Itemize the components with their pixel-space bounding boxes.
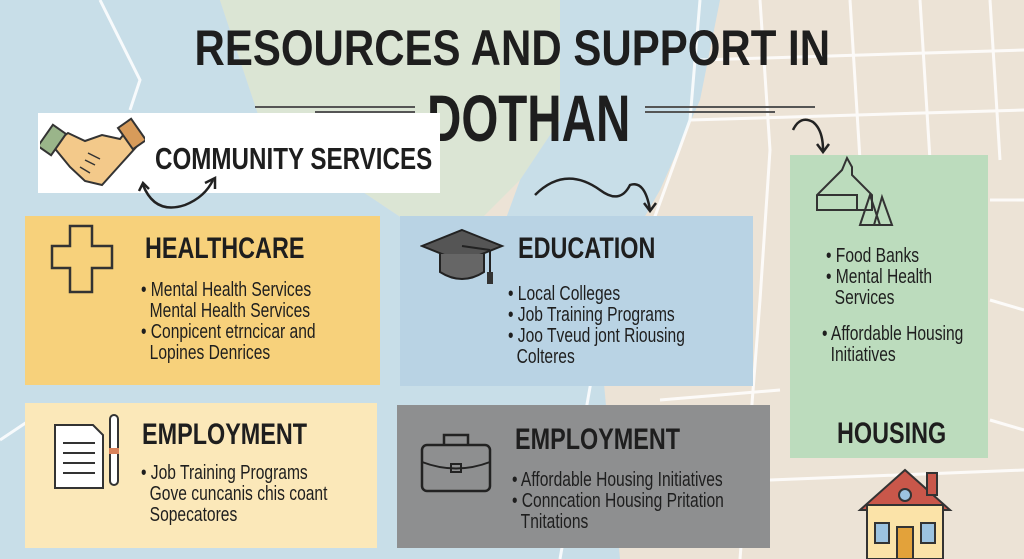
bullets bbox=[141, 279, 316, 364]
bullets: • Joo Tveud jont Riousing bbox=[508, 325, 685, 347]
panel: healthcare bbox=[25, 216, 380, 385]
icon: graduation cap bbox=[420, 228, 504, 284]
bullets: • Mental Health Services bbox=[141, 279, 311, 301]
bullets: • Local Colleges bbox=[508, 283, 620, 305]
bullets: Services bbox=[835, 287, 894, 309]
bullets: • Conncation Housing Pritation bbox=[512, 490, 724, 512]
bullets: • Mental Health bbox=[826, 266, 932, 288]
icon: document bbox=[54, 414, 119, 489]
bullets bbox=[141, 462, 328, 526]
bullets: Gove cuncanis chis coant bbox=[150, 483, 327, 505]
panel: education bbox=[400, 216, 753, 386]
heading: HOUSING bbox=[837, 417, 946, 450]
panel: housing: Initiatives bbox=[831, 344, 896, 366]
heading: EDUCATION bbox=[518, 232, 655, 265]
arrow: housing bbox=[792, 118, 830, 154]
bullets: Colteres bbox=[517, 346, 575, 368]
panel: employment left bbox=[25, 403, 377, 548]
icon: briefcase bbox=[420, 434, 492, 492]
bullets: Tnitations bbox=[521, 511, 588, 533]
bullets: • Job Training Programs bbox=[141, 462, 308, 484]
bullets: • Conpicent etrncicar and bbox=[141, 321, 316, 343]
icon: cross bbox=[50, 224, 114, 294]
heading: HEALTHCARE bbox=[145, 232, 304, 265]
panel: housing: • Affordable Housing bbox=[822, 323, 963, 345]
title: RESOURCES AND SUPPORT IN bbox=[194, 20, 830, 76]
heading: EMPLOYMENT bbox=[142, 418, 307, 451]
bullets: Sopecatores bbox=[150, 504, 237, 526]
title line 2: DOTHAN bbox=[427, 81, 630, 155]
heading: COMMUNITY SERVICES bbox=[155, 141, 432, 176]
panel: housing bbox=[790, 155, 988, 458]
arrow: education bbox=[534, 177, 657, 213]
bullets bbox=[826, 245, 932, 309]
arrow: community bbox=[138, 176, 216, 209]
bullets: Lopines Denrices bbox=[150, 342, 270, 364]
panel: community services bbox=[38, 113, 440, 193]
bullets bbox=[512, 469, 724, 533]
heading: EMPLOYMENT bbox=[515, 423, 680, 456]
bullets: • Affordable Housing Initiatives bbox=[512, 469, 723, 491]
bullets bbox=[508, 283, 685, 368]
icon: landmark bbox=[816, 156, 894, 226]
panel: employment gray bbox=[397, 405, 770, 548]
icon: house bbox=[858, 468, 952, 559]
bullets: Mental Health Services bbox=[150, 300, 310, 322]
bullets: • Food Banks bbox=[826, 245, 919, 267]
icon: handshake bbox=[40, 117, 145, 186]
bullets: • Job Training Programs bbox=[508, 304, 675, 326]
